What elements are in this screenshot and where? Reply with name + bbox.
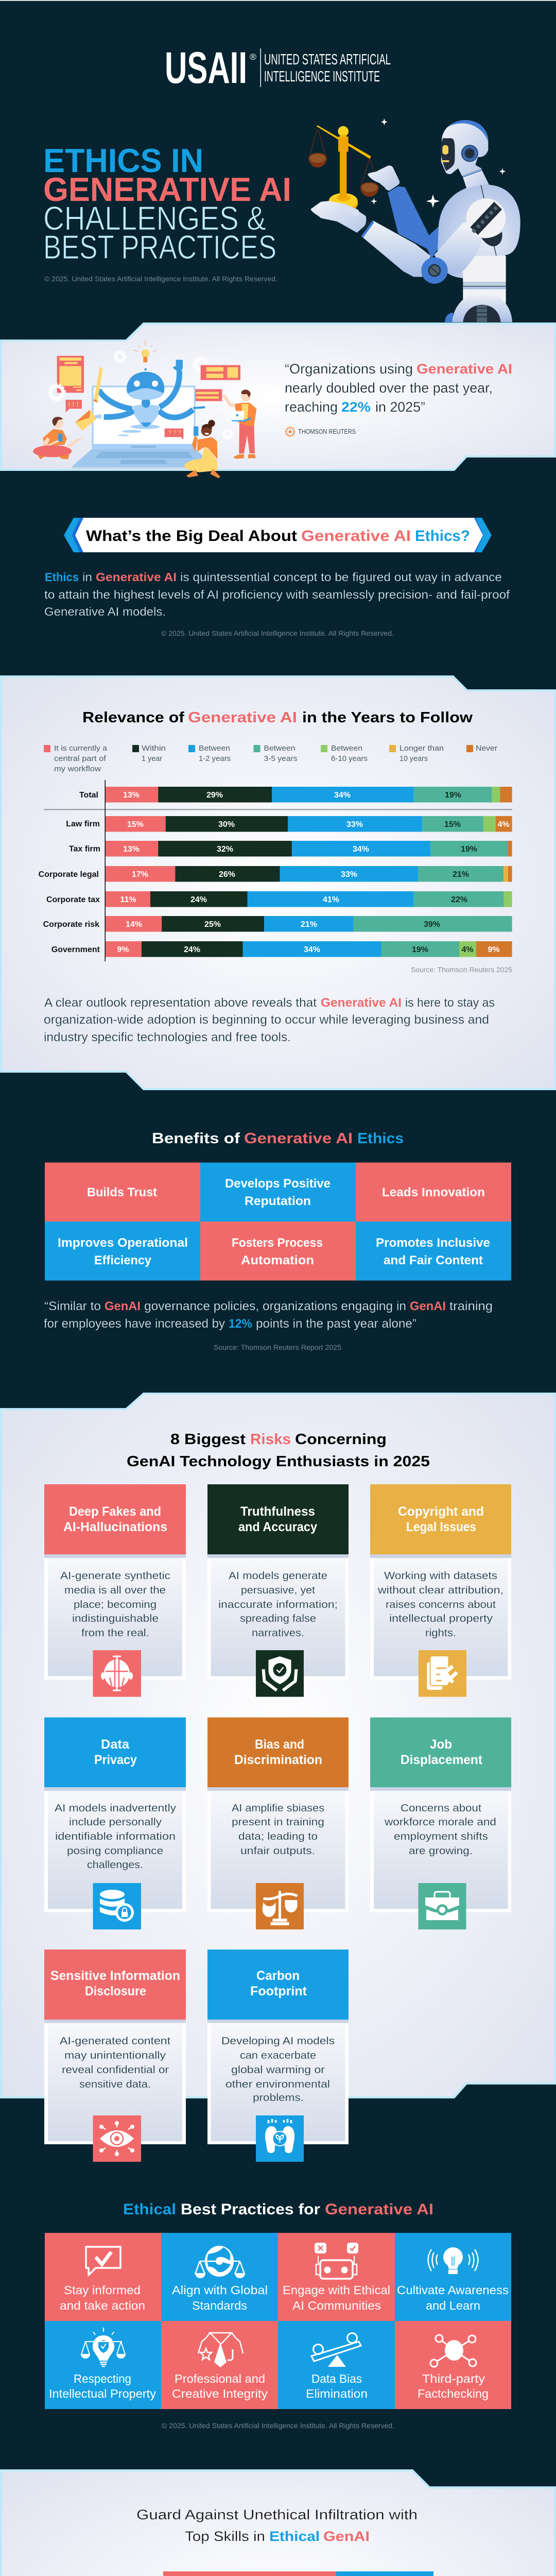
risk card: deep fakes: indistinguishable: [72, 1613, 159, 1624]
practice: creative integrity: [161, 2321, 278, 2409]
practice: fact checking: [395, 2321, 511, 2409]
risk card: job displacement: are growing.: [409, 1845, 473, 1857]
call to action text: Ethical: [269, 2529, 320, 2544]
row: Total: [79, 787, 512, 803]
risk card: copyright: rights.: [425, 1627, 456, 1639]
risk card: carbon footprint: [207, 1950, 349, 2162]
benefit: Fosters Process Automation: Automation: [241, 1253, 314, 1267]
risk card: carbon footprint: Footprint: [250, 1984, 307, 1998]
chart legend: [44, 744, 497, 773]
quote: generative AI adoption stat: 22%: [341, 399, 371, 415]
training quote: training: [449, 1299, 493, 1313]
risk card: deep fakes: media is all over the: [64, 1584, 166, 1596]
row: Tax firm: 34%: [353, 845, 369, 854]
benefits source: Source: Thomson Reuters Report 2025: [214, 1343, 341, 1351]
benefits heading: Generative AI: [244, 1130, 353, 1147]
row: Tax firm: 32%: [217, 845, 233, 854]
row: Corporate tax: 24%: [190, 895, 207, 904]
practice: fact checking: Third-party: [422, 2372, 485, 2385]
logo: USAII header: UNITED STATES ARTIFICIAL: [264, 52, 391, 68]
row: Tax firm: 13%: [123, 845, 140, 854]
source logo: Thomson Reuters: THOMSON REUTERS: [298, 428, 356, 435]
quote: generative AI adoption stat: [285, 361, 512, 415]
row: Law firm: 15%: [127, 820, 144, 829]
risk card: bias: Bias and: [255, 1737, 304, 1752]
intro paragraph: Generative AI: [96, 570, 177, 584]
row: Total: 34%: [334, 791, 351, 800]
practice: data bias: [278, 2321, 395, 2409]
copyright: © 2025. United States Artificial Intelligence Institute. All Rights Reserved.: [162, 2421, 394, 2430]
title: BEST PRACTICES: [43, 228, 276, 266]
chart takeaway paragraph: organization-wide adoption is beginning to occur while leveraging business and: [44, 1013, 489, 1027]
row: Corporate legal: Corporate legal: [39, 870, 99, 879]
risk card: sensitive information: Sensitive Information: [50, 1969, 180, 1983]
benefits heading: Ethics: [357, 1130, 404, 1147]
practice: awareness: [395, 2233, 511, 2321]
icon: briefcase with gear: [425, 1892, 459, 1920]
logo: USAII header: INTELLIGENCE INSTITUTE: [264, 69, 380, 85]
chart legend: Between: [331, 744, 362, 753]
risk card: bias: Discrimination: [234, 1753, 322, 1767]
risk card: sensitive information: [44, 1950, 186, 2162]
risk card: bias: [207, 1718, 349, 1929]
icon: database with lock: [100, 1890, 134, 1922]
intro paragraph: is quintessential concept to be figured out way in advance: [180, 570, 502, 584]
illustration: AI robot with laptop and people: [33, 341, 256, 478]
risk card: deep fakes: from the real.: [81, 1627, 149, 1639]
call to action text: [136, 2507, 418, 2544]
risk card: truthfulness: [207, 1484, 349, 1697]
row: Tax firm: 19%: [461, 845, 477, 854]
risk card: data privacy: identifiable information: [55, 1831, 176, 1842]
row: Corporate tax: Corporate tax: [46, 895, 100, 904]
chart legend: my workflow: [54, 765, 101, 773]
title: ETHICS IN: [43, 142, 203, 179]
row: Government: 34%: [304, 945, 320, 954]
chart legend: Within: [142, 744, 166, 753]
risk card: sensitive information: sensitive data.: [79, 2078, 151, 2090]
icon: molecule network: [430, 2335, 476, 2367]
practice: ethical communities: AI Communities: [292, 2299, 381, 2312]
best practices heading: Best Practices for: [181, 2201, 320, 2218]
training quote: “Similar to: [44, 1299, 101, 1313]
title: GENERATIVE AI: [43, 171, 291, 208]
row: Corporate legal: 26%: [219, 870, 235, 879]
stacked bar chart: [39, 780, 512, 961]
training quote: for employees have increased by: [44, 1317, 225, 1331]
chart legend: 1-2 years: [199, 754, 231, 763]
row: Corporate tax: 41%: [323, 895, 339, 904]
icon: split mask face: [101, 1656, 133, 1690]
risk card: sensitive information: Disclosure: [85, 1984, 146, 1998]
call to action text: Guard Against Unethical Infiltration with: [136, 2507, 418, 2522]
practice: intellectual property: [45, 2321, 161, 2409]
risk card: truthfulness: and Accuracy: [238, 1520, 317, 1534]
logo: USAII header: ®: [250, 52, 256, 62]
intro paragraph: in: [82, 570, 92, 584]
risk card: data privacy: posing compliance: [67, 1845, 163, 1857]
practice: ethical communities: Engage with Ethical: [283, 2283, 390, 2297]
chart legend: Longer than: [399, 744, 444, 753]
quote: generative AI adoption stat: Generative AI: [416, 361, 512, 377]
benefit: Develops Positive Reputation: Reputation: [245, 1194, 311, 1208]
chart legend: central part of: [54, 754, 107, 763]
risk card: deep fakes: Deep Fakes and: [69, 1504, 161, 1519]
chart legend: It is currently a: [54, 744, 108, 753]
row: Corporate risk: 25%: [204, 920, 221, 929]
risk card: sensitive information: may unintentionally: [64, 2049, 166, 2061]
icon: robot with choices: [315, 2243, 358, 2279]
risk card: sensitive information: AI-generated content: [60, 2035, 170, 2047]
benefit: Promotes Inclusive and Fair Content: Promotes Inclusive: [376, 1236, 490, 1250]
risk card: job displacement: Concerns about: [401, 1802, 481, 1814]
row: Government: 9%: [488, 945, 500, 954]
risk card: deep fakes: AI-Hallucinations: [63, 1520, 167, 1534]
practice: intellectual property: Intellectual Property: [49, 2387, 157, 2400]
quote: generative AI adoption stat: in 2025”: [375, 399, 425, 415]
row: Corporate risk: 14%: [126, 920, 142, 929]
risk card: carbon footprint: other environmental: [225, 2078, 330, 2090]
quote: generative AI adoption stat: nearly doubled over the past year,: [285, 380, 493, 396]
risk card: job displacement: [370, 1718, 511, 1929]
risks heading: Concerning: [295, 1431, 387, 1448]
icon: lightbulb signal: [428, 2247, 478, 2274]
risk card: truthfulness: Truthfulness: [240, 1504, 315, 1519]
practice: global standards: Standards: [192, 2299, 247, 2312]
benefit: Develops Positive Reputation: [200, 1162, 356, 1222]
risks heading: Risks: [250, 1431, 291, 1448]
practice: ethical communities: [278, 2233, 395, 2321]
row: Government: 24%: [184, 945, 200, 954]
training quote: [44, 1299, 493, 1331]
best practices grid: [45, 2233, 511, 2409]
row: Law firm: 4%: [497, 820, 510, 829]
risk card: copyright: Legal Issues: [406, 1520, 476, 1534]
chart takeaway paragraph: [44, 996, 495, 1044]
benefit: Improves Operational Efficiency: Improves Operational: [58, 1236, 188, 1250]
row: Law firm: 33%: [346, 820, 363, 829]
quote: generative AI adoption stat: reaching: [285, 399, 338, 415]
heading ribbon: big deal: [64, 518, 492, 552]
chart takeaway paragraph: Generative AI: [321, 996, 402, 1010]
become ethicist banner: [69, 2571, 486, 2576]
chart heading: [82, 709, 473, 726]
row: Government: [51, 941, 512, 957]
benefit: Promotes Inclusive and Fair Content: [356, 1222, 511, 1281]
copyright: © 2025. United States Artificial Intelligence Institute. All Rights Reserved.: [44, 275, 277, 283]
panel: call to action: [0, 2469, 556, 2576]
icon: globe on scales: [195, 2246, 245, 2278]
practice: fact checking: Factchecking: [418, 2387, 489, 2400]
risk card: carbon footprint: Developing AI models: [221, 2035, 335, 2047]
row: Government: 9%: [117, 945, 129, 954]
risk card: carbon footprint: global warming or: [231, 2064, 325, 2076]
chart legend: 10 years: [399, 754, 428, 763]
intro paragraph: to attain the highest levels of AI proficiency with seamlessly precision- and fail-proof: [44, 588, 510, 601]
risk card: deep fakes: AI-generate synthetic: [60, 1570, 170, 1582]
source logo: Thomson Reuters: [286, 428, 356, 436]
risk card: data privacy: include personally: [69, 1816, 162, 1828]
row: Corporate risk: [43, 916, 512, 931]
practice: creative integrity: Professional and: [175, 2372, 265, 2385]
risk card: copyright: intellectual property: [389, 1613, 493, 1624]
row: Government: Government: [51, 945, 100, 954]
chart heading: in the Years to Follow: [302, 709, 473, 726]
benefit: Fosters Process Automation: [200, 1222, 356, 1281]
risk card: truthfulness: AI models generate: [229, 1570, 327, 1582]
benefits heading: [152, 1130, 404, 1147]
person left: [33, 417, 83, 460]
practice: data bias: Data Bias: [311, 2372, 362, 2385]
row: Law firm: 15%: [444, 820, 461, 829]
heading ribbon: big deal: Ethics?: [415, 528, 470, 545]
risk card: data privacy: Privacy: [94, 1753, 137, 1767]
risk card: bias: present in training: [232, 1816, 324, 1828]
heading ribbon: big deal: Generative AI: [301, 528, 411, 545]
risk card: sensitive information: reveal confidential or: [62, 2064, 169, 2076]
training quote: GenAI: [105, 1299, 141, 1313]
risk card: copyright: Working with datasets: [384, 1570, 497, 1582]
title: CHALLENGES &: [43, 199, 266, 237]
chart legend: 3-5 years: [264, 754, 298, 763]
logo: USAII header: USAII: [165, 43, 247, 93]
row: Corporate risk: Corporate risk: [43, 920, 99, 929]
row: Government: 19%: [412, 945, 428, 954]
row: Corporate legal: 17%: [132, 870, 148, 879]
benefit: Promotes Inclusive and Fair Content: and Fair Content: [384, 1253, 483, 1267]
risk card: truthfulness: spreading false: [240, 1613, 316, 1624]
risk card: bias: unfair outputs.: [240, 1845, 315, 1857]
benefits grid: [45, 1162, 511, 1281]
chart heading: Relevance of: [82, 709, 184, 726]
row: Law firm: [66, 816, 512, 832]
risk card: carbon footprint: Carbon: [256, 1969, 300, 1983]
practice: intellectual property: Respecting: [74, 2372, 131, 2385]
row: Corporate tax: [46, 891, 512, 907]
row: Corporate legal: 33%: [341, 870, 357, 879]
chart source: Source: Thomson Reuters 2025: [411, 965, 512, 974]
chart legend: 1 year: [142, 754, 162, 763]
row: Corporate tax: 11%: [120, 895, 136, 904]
training quote: governance policies, organizations engaging in: [144, 1299, 406, 1313]
heading ribbon: big deal: What’s the Big Deal About: [86, 528, 297, 545]
practice: stay informed: [45, 2233, 161, 2321]
benefit: Improves Operational Efficiency: [45, 1222, 200, 1281]
chart takeaway paragraph: industry specific technologies and free tools.: [44, 1030, 291, 1044]
training quote: points in the past year alone”: [256, 1317, 416, 1331]
icon: eye with nodes: [99, 2121, 134, 2156]
risk card: data privacy: [44, 1718, 186, 1929]
illustration: robot holding scales: [308, 118, 520, 322]
risk card: carbon footprint: can exacerbate: [240, 2049, 316, 2061]
icon: bulb with scales: [81, 2328, 126, 2366]
row: Tax firm: [69, 841, 512, 856]
practice: stay informed: and take action: [60, 2299, 145, 2312]
chart legend: Between: [264, 744, 296, 753]
call to action text: GenAI: [323, 2529, 370, 2544]
row: Government: 4%: [461, 945, 474, 954]
risk card: job displacement: Job: [430, 1737, 452, 1752]
illustration: AI robot with laptop and people: ???: [168, 429, 183, 436]
benefit: Leads Innovation: Leads Innovation: [382, 1185, 485, 1199]
risk card: carbon footprint: problems.: [253, 2092, 304, 2104]
risks heading: 8 Biggest: [170, 1431, 246, 1448]
icon: seesaw: [311, 2333, 361, 2367]
best practices heading: [123, 2201, 433, 2218]
risks heading: [127, 1431, 430, 1470]
risks heading: GenAI Technology Enthusiasts in 2025: [127, 1453, 430, 1470]
risk card: truthfulness: inaccurate information;: [218, 1599, 338, 1611]
icon: chat check: [86, 2247, 120, 2275]
practice: global standards: [161, 2233, 278, 2321]
risk card: copyright: [370, 1484, 511, 1697]
practice: stay informed: Stay informed: [64, 2283, 141, 2297]
best practices heading: Generative AI: [325, 2201, 433, 2218]
risk card: copyright: Copyright and: [398, 1504, 484, 1519]
icon: shirt and tie: [198, 2333, 243, 2367]
benefit: Develops Positive Reputation: Develops Positive: [225, 1177, 331, 1191]
row: Law firm: 30%: [218, 820, 235, 829]
row: Total: 13%: [123, 791, 140, 800]
quote: generative AI adoption stat: “Organizations using: [285, 361, 413, 377]
illustration: AI robot with laptop and people: !!!: [68, 401, 81, 409]
practice: data bias: Elimination: [306, 2387, 368, 2400]
practice: awareness: and Learn: [426, 2299, 480, 2312]
title: [43, 142, 291, 266]
training quote: 12%: [229, 1317, 252, 1331]
chart legend: 6-10 years: [331, 754, 368, 763]
row: Total: 29%: [206, 791, 223, 800]
call to action text: Top Skills in: [185, 2529, 265, 2544]
person right: [221, 389, 256, 459]
best practices heading: Ethical: [123, 2201, 176, 2218]
row: Corporate risk: 21%: [301, 920, 317, 929]
row: Corporate legal: 21%: [453, 870, 469, 879]
benefit: Builds Trust: [45, 1162, 200, 1222]
training quote: GenAI: [410, 1299, 446, 1313]
risk card: bias: data; leading to: [238, 1831, 318, 1842]
panel: relevance chart: [1, 676, 555, 1089]
icon: footprints with leaf: [265, 2119, 294, 2153]
intro paragraph: Generative AI models.: [44, 605, 166, 618]
benefit: Leads Innovation: [356, 1162, 511, 1222]
chart legend: Never: [476, 744, 497, 753]
intro paragraph: Ethics: [45, 570, 79, 584]
risk card: job displacement: Displacement: [401, 1753, 483, 1767]
risk card: job displacement: employment shifts: [394, 1831, 488, 1842]
risk card: truthfulness: persuasive, yet: [241, 1584, 315, 1596]
practice: global standards: Align with Global: [172, 2283, 268, 2297]
risk card: copyright: raises concerns about: [386, 1599, 496, 1611]
person woman: [184, 420, 220, 478]
chart heading: Generative AI: [188, 709, 297, 726]
risk card: deep fakes: [44, 1484, 186, 1697]
benefit: Fosters Process Automation: Fosters Process: [232, 1236, 323, 1250]
chart takeaway paragraph: A clear outlook representation above reveals that: [44, 996, 317, 1010]
icon: legal document and gavel: [427, 1656, 457, 1690]
logo: USAII header: [165, 43, 391, 93]
risk card: deep fakes: place; becoming: [74, 1599, 157, 1611]
row: Total: Total: [79, 791, 98, 800]
icon: shield in hands: [264, 1656, 297, 1690]
intro paragraph: [44, 570, 510, 618]
risk card: data privacy: AI models inadvertently: [55, 1802, 177, 1814]
row: Corporate legal: [39, 866, 512, 882]
benefit: Improves Operational Efficiency: Efficiency: [94, 1253, 152, 1267]
panel: stat banner: [1, 324, 555, 470]
benefits heading: Benefits of: [152, 1130, 240, 1147]
row: Corporate tax: 22%: [451, 895, 467, 904]
chart takeaway paragraph: is here to stay as: [405, 996, 495, 1010]
risk card: copyright: without clear attribution,: [377, 1584, 503, 1596]
chart legend: Between: [199, 744, 230, 753]
row: Corporate risk: 39%: [424, 920, 440, 929]
row: Law firm: Law firm: [66, 820, 100, 828]
practice: creative integrity: Creative Integrity: [172, 2387, 268, 2400]
risk card: data privacy: Data: [101, 1737, 130, 1752]
benefit: Builds Trust: Builds Trust: [87, 1185, 157, 1199]
icon: scales of justice: [263, 1891, 298, 1925]
risk card: bias: AI amplifie sbiases: [232, 1802, 324, 1814]
risk card: truthfulness: narratives.: [252, 1627, 304, 1639]
risk card: data privacy: challenges.: [87, 1859, 143, 1871]
panel: risks: [1, 1394, 555, 2097]
risk card: job displacement: workforce morale and: [384, 1816, 496, 1828]
copyright: © 2025. United States Artificial Intelligence Institute. All Rights Reserved.: [161, 629, 394, 637]
practice: awareness: Cultivate Awareness: [397, 2283, 509, 2297]
row: Total: 19%: [445, 791, 461, 800]
row: Tax firm: Tax firm: [69, 845, 100, 853]
